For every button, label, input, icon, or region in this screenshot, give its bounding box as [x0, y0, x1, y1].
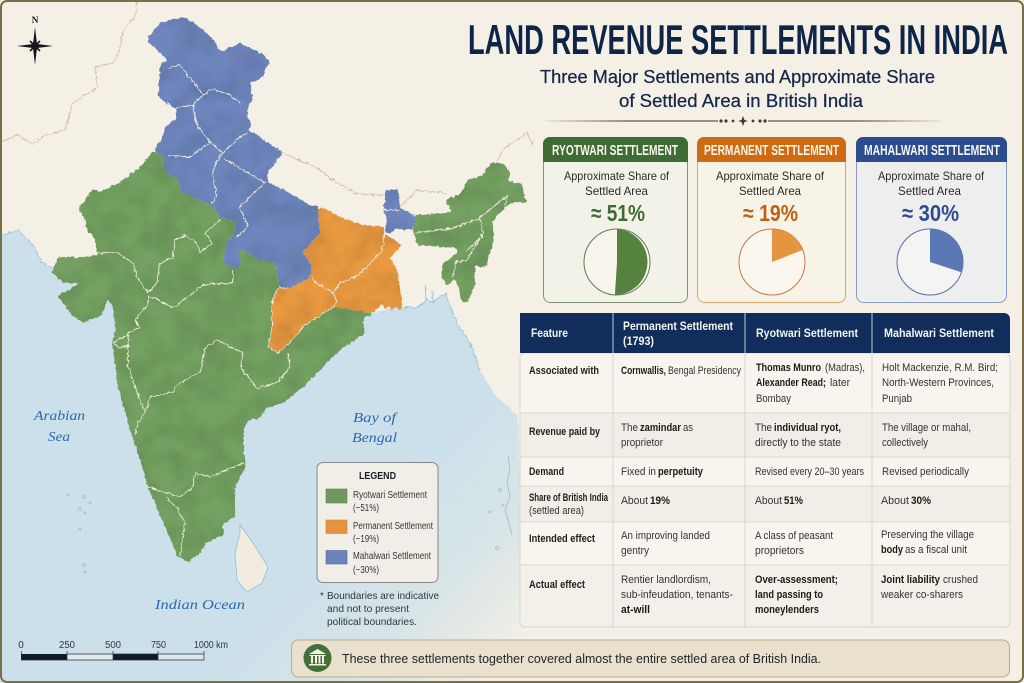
legend — [317, 462, 438, 582]
pie chart: 19% — [739, 229, 805, 295]
row: Actual effect — [529, 574, 978, 616]
row: Revenue paid by: zamindar — [640, 422, 682, 434]
region: Permanent settlement areas — [268, 206, 402, 353]
row: Demand: Revised periodically — [882, 466, 969, 478]
note on boundaries: and not to present — [327, 603, 409, 615]
row: Share of British India: 30% — [911, 495, 931, 507]
row: Associated with: Associated with — [529, 365, 599, 377]
table header: Feature — [531, 326, 568, 340]
row: Associated with — [529, 362, 998, 405]
subtitle: of Settled Area in British India — [619, 90, 864, 111]
row: Actual effect: Joint liability — [881, 574, 941, 586]
panel: Mahalwari settlement card: ≈ 30% — [902, 200, 959, 226]
row: Share of British India: About — [621, 495, 648, 507]
row: Share of British India: 19% — [650, 495, 670, 507]
panel: Ryotwari settlement card: Approximate Share of — [564, 169, 670, 183]
coastline — [0, 230, 480, 370]
row: Revenue paid by: as — [683, 422, 693, 434]
row: Intended effect: An improving landed — [621, 530, 710, 542]
note on boundaries: political boundaries. — [327, 616, 417, 628]
row: Demand: perpetuity — [658, 466, 704, 478]
row: Associated with: Bombay — [756, 393, 791, 405]
row: Actual effect: sub-infeudation, tenants- — [621, 589, 733, 601]
label: Bay of Bengal — [352, 411, 399, 446]
table header: Mahalwari Settlement — [884, 326, 994, 340]
row: Revenue paid by: proprietor — [621, 437, 663, 449]
legend item: Ryotwari — [326, 489, 427, 514]
row: Intended effect — [529, 529, 974, 557]
panel: Permanent settlement card: PERMANENT SETTLEMENT — [704, 143, 839, 159]
row: Associated with: Bengal Presidency — [668, 365, 741, 377]
row: Revenue paid by: collectively — [882, 437, 928, 449]
scale bar — [18, 640, 228, 660]
ornamental divider — [545, 116, 941, 126]
panel: Mahalwari settlement card: Settled Area — [898, 184, 961, 198]
row: Demand: Revised every 20–30 years — [755, 466, 864, 478]
row: Actual effect: Actual effect — [529, 579, 585, 591]
icon: compass rose: N — [32, 16, 39, 26]
panel: Permanent settlement card: Settled Area — [739, 184, 801, 198]
internal province boundaries — [98, 65, 508, 557]
row: Revenue paid by: Revenue paid by — [529, 426, 601, 438]
legend item: Mahalwari: (~30%) — [353, 565, 379, 576]
Sri Lanka — [235, 525, 268, 592]
table header: Ryotwari Settlement — [756, 326, 858, 340]
legend item: Ryotwari: Ryotwari Settlement — [353, 490, 427, 501]
subtitle: Three Major Settlements and Approximate Share — [540, 66, 935, 87]
panel: Permanent settlement card: ≈ 19% — [743, 200, 798, 226]
legend: LEGEND — [359, 471, 396, 482]
row: Intended effect: Intended effect — [529, 533, 595, 545]
row: Actual effect: land passing to — [755, 589, 823, 601]
row: Revenue paid by: individual ryot, — [774, 422, 841, 434]
row: Actual effect: Over-assessment; — [755, 574, 838, 586]
table header: Permanent Settlement — [623, 319, 733, 333]
row: Share of British India: About — [755, 495, 782, 507]
row: Share of British India — [529, 492, 931, 517]
panel: Ryotwari settlement card: RYOTWARI SETTLEMENT — [552, 143, 678, 159]
row: Actual effect: Rentier landlordism, — [621, 574, 711, 586]
label: Indian Ocean: Indian Ocean — [154, 598, 245, 613]
row: Intended effect: body — [881, 544, 904, 556]
scale bar: 250 — [59, 640, 75, 651]
comparison table — [520, 313, 1010, 627]
legend item: Permanent — [326, 520, 433, 545]
panel: Permanent settlement card: Approximate Share of — [716, 169, 825, 183]
icon: classical building — [304, 644, 332, 672]
note on boundaries: * — [320, 591, 324, 602]
table header — [520, 313, 1010, 353]
panel: Mahalwari settlement card — [856, 137, 1007, 302]
row: Intended effect: as a fiscal unit — [905, 544, 967, 556]
row: Share of British India: (settled area) — [529, 505, 584, 517]
row: Intended effect: proprietors — [755, 545, 804, 557]
table body background — [520, 353, 1010, 627]
row: Demand: Demand — [529, 466, 564, 478]
label: Arabian Sea — [33, 409, 85, 445]
row: Revenue paid by: The — [755, 422, 772, 434]
row: Share of British India: About — [881, 495, 909, 507]
row: Associated with: North-Western Provinces, — [882, 377, 994, 389]
row: Associated with: (Madras), — [825, 362, 865, 374]
row: Actual effect: crushed — [943, 574, 978, 586]
icon: compass rose — [17, 16, 53, 65]
callout: conclusion — [292, 640, 1010, 677]
row: Associated with: Holt Mackenzie, R.M. Bird; — [882, 362, 998, 374]
row: Associated with: Punjab — [882, 393, 912, 405]
row: Intended effect: A class of peasant — [755, 530, 833, 542]
row: Actual effect: at-will — [621, 604, 650, 616]
row: Revenue paid by — [529, 422, 971, 449]
pie chart: 51% — [584, 229, 650, 295]
legend item: Mahalwari — [326, 550, 431, 576]
callout: conclusion: These three settlements together covered almost the entire settled area of British India. — [342, 651, 821, 666]
scale bar: 500 — [105, 640, 121, 651]
row: Demand: Fixed in — [621, 466, 656, 478]
row: Revenue paid by: The — [621, 422, 638, 434]
table header: (1793) — [623, 334, 654, 348]
scale bar: 1000 km — [194, 640, 228, 651]
region: Ryotwari settlement areas — [52, 150, 527, 562]
neighbouring international borders — [2, 2, 533, 207]
subtitle — [540, 66, 935, 111]
legend item: Mahalwari: Mahalwari Settlement — [353, 551, 431, 562]
row: Associated with: Alexander Read; — [756, 377, 826, 389]
label: Bay of Bengal: Bengal — [352, 431, 397, 446]
legend item: Permanent: Permanent Settlement — [353, 521, 433, 532]
panel: Ryotwari settlement card: Settled Area — [585, 184, 648, 198]
row: Share of British India: 51% — [784, 495, 803, 507]
islands — [67, 455, 512, 573]
row: Associated with: later — [830, 377, 850, 389]
row: Demand — [529, 466, 969, 478]
pie chart: 30% — [897, 229, 963, 295]
sea — [0, 230, 524, 683]
region: Mahalwari settlement areas — [148, 17, 415, 288]
row: Revenue paid by: The village or mahal, — [882, 422, 971, 434]
row: Associated with: Thomas Munro — [756, 362, 821, 374]
row: Intended effect: Preserving the village — [881, 529, 974, 541]
row: Actual effect: weaker co-sharers — [880, 589, 963, 601]
legend item: Permanent: (~19%) — [353, 534, 379, 545]
row: Associated with: Cornwallis, — [621, 365, 666, 377]
scale bar: 750 — [151, 640, 166, 651]
note on boundaries — [320, 590, 439, 628]
label: Arabian Sea: Sea — [48, 430, 70, 445]
label: Bay of Bengal: Bay of — [353, 411, 399, 426]
label: Arabian Sea: Arabian — [33, 409, 85, 424]
row: Actual effect: moneylenders — [755, 604, 819, 616]
row: Intended effect: gentry — [621, 545, 649, 557]
row: Share of British India: Share of British India — [529, 492, 609, 504]
legend item: Ryotwari: (~51%) — [353, 503, 379, 514]
panel: Ryotwari settlement card: ≈ 51% — [591, 200, 645, 226]
panel: Permanent settlement card — [697, 137, 846, 302]
panel: Mahalwari settlement card: Approximate Share of — [878, 169, 985, 183]
note on boundaries: Boundaries are indicative — [327, 590, 439, 602]
map of India — [0, 2, 533, 683]
panel: Ryotwari settlement card — [543, 137, 688, 302]
row: Revenue paid by: directly to the state — [755, 437, 841, 449]
scale bar: 0 — [18, 640, 24, 651]
